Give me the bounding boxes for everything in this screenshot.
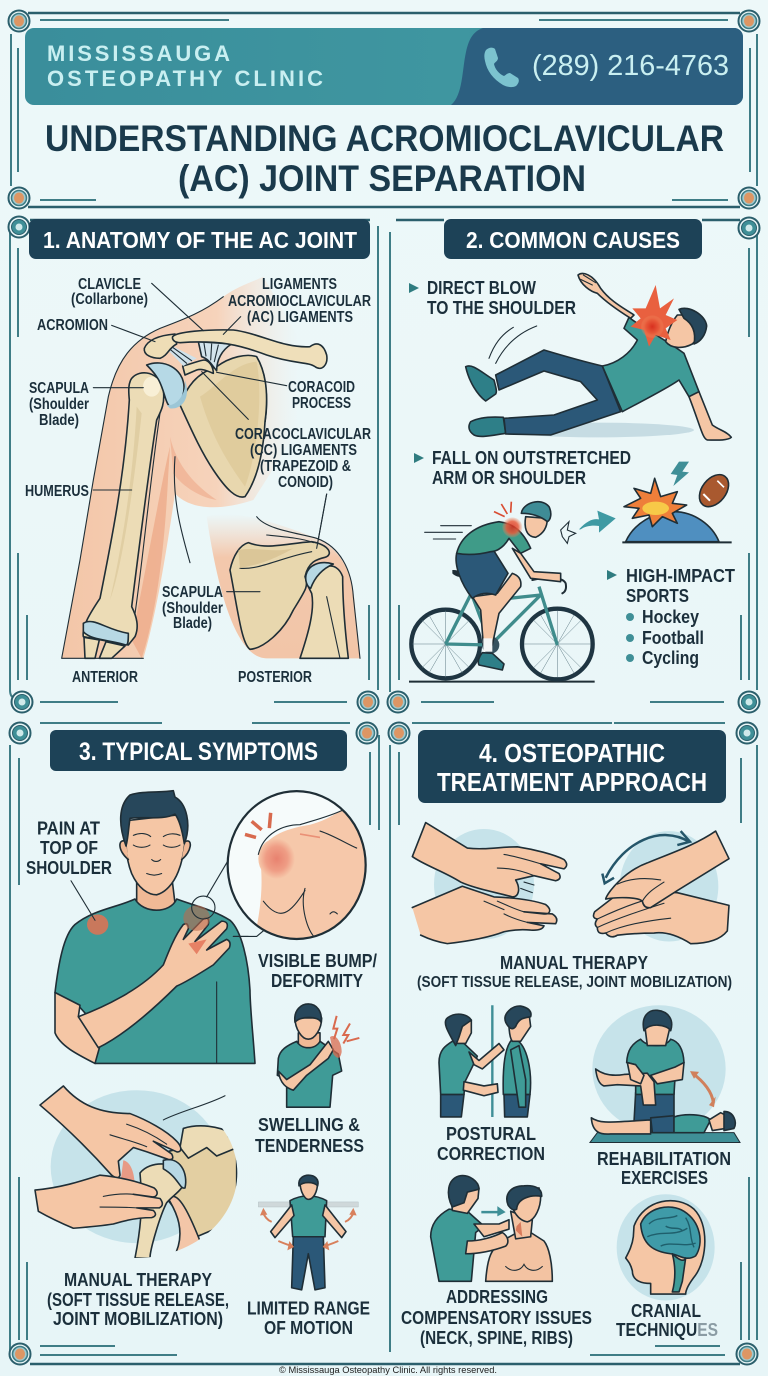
- anatomy labels: ANTERIOR: [72, 669, 138, 686]
- panel 2 frame: [388, 218, 760, 712]
- fall label: ARM OR SHOULDER: [432, 468, 586, 488]
- anatomy labels: ACROMIOCLAVICULAR: [228, 293, 371, 310]
- rotation arrow: [606, 835, 689, 878]
- illustration: addressing compensatory issues: [431, 1176, 552, 1281]
- treatment text: rehabilitation: REHABILITATION: [597, 1149, 731, 1169]
- high-impact sports list: Football: [642, 628, 704, 648]
- therapist: [441, 1094, 464, 1117]
- head: [126, 814, 186, 895]
- symptom text: manual therapy: JOINT MOBILIZATION): [53, 1309, 223, 1329]
- therapist lower hand: [35, 1175, 162, 1228]
- panel 2 heading: [444, 219, 702, 259]
- high-impact sports list: Cycling: [642, 648, 699, 668]
- trailing leg and shoes: [466, 366, 496, 401]
- treatment text: manual therapy: [417, 953, 732, 991]
- symptom text: bump: DEFORMITY: [271, 971, 363, 991]
- panel 3 frame: [10, 722, 384, 1364]
- anatomy labels: HUMERUS: [25, 483, 89, 500]
- panel 3 heading: [50, 730, 347, 771]
- shoulder pain marks: [183, 905, 210, 931]
- acromion: [144, 334, 177, 358]
- small spark: [561, 522, 576, 543]
- symptom text: bump: VISIBLE BUMP/: [258, 951, 377, 971]
- upper arm: [55, 992, 100, 1063]
- banner teal band: [25, 28, 743, 105]
- therapist torso: [627, 1039, 684, 1094]
- direct blow label: [409, 278, 576, 318]
- copyright footer: © Mississauga Osteopathy Clinic. All rights reserved.: [279, 1365, 497, 1375]
- anatomy labels: CLAVICLE: [78, 276, 141, 293]
- illustration: cyclist: [409, 502, 595, 682]
- direct blow label: TO THE SHOULDER: [427, 298, 576, 318]
- helmet dome: [626, 512, 719, 542]
- illustration: manual therapy on shoulder: [35, 1086, 237, 1258]
- symptom text: pain: PAIN AT: [37, 818, 100, 838]
- panel: anatomy of the AC joint: [8, 216, 378, 712]
- anatomy labels: LIGAMENTS: [262, 276, 337, 293]
- panel: typical symptoms: [10, 722, 384, 1364]
- pain spot on cyclist: [502, 517, 522, 537]
- lightning: [671, 462, 689, 486]
- symptom text: manual therapy: (SOFT TISSUE RELEASE,: [47, 1290, 229, 1310]
- cyclist shorts: [456, 548, 508, 598]
- patient body: [486, 1233, 552, 1281]
- illustration: man with shoulder pain: [55, 791, 370, 1063]
- therapist: [431, 1209, 484, 1281]
- raised arm: [578, 274, 634, 318]
- illustration: rehabilitation exercises: [590, 1005, 740, 1142]
- title: (AC) JOINT SEPARATION: [178, 157, 586, 199]
- treatment text: compensatory: ADDRESSING: [446, 1287, 548, 1307]
- cyclist head and helmet: [525, 517, 547, 537]
- anatomy labels: (Shoulder: [29, 396, 89, 413]
- title: [45, 117, 724, 199]
- neck: [137, 876, 175, 914]
- crossing forearm and hand: [78, 918, 230, 1048]
- clavicle: [172, 330, 327, 368]
- symptom text: manual therapy: MANUAL THERAPY: [64, 1270, 212, 1290]
- cyclist arm: [512, 548, 561, 582]
- posterior scapula: [230, 542, 329, 649]
- acromioclavicular ligaments: [198, 342, 232, 371]
- humerus bone: [83, 373, 164, 645]
- magnifier small circle: [192, 896, 215, 919]
- panel 2 heading: 2. COMMON CAUSES: [466, 227, 680, 253]
- treatment text: compensatory: [401, 1287, 592, 1348]
- illustration: cranial techniques head and brain: [617, 1194, 715, 1300]
- facial features: [133, 833, 180, 875]
- clinic name: MISSISSAUGA: [47, 41, 230, 66]
- clinic name: OSTEOPATHY CLINIC: [47, 66, 323, 91]
- anatomy labels: CONOID): [278, 474, 333, 491]
- treatment text: compensatory: COMPENSATORY ISSUES: [401, 1308, 592, 1328]
- header frame: [8, 10, 760, 208]
- treatment text: compensatory: (NECK, SPINE, RIBS): [420, 1328, 573, 1348]
- anatomy labels: (AC) LIGAMENTS: [247, 309, 353, 326]
- anatomy labels: CORACOID: [288, 379, 355, 396]
- panel 4 heading: 4. OSTEOPATHIC: [479, 740, 665, 768]
- panel: common causes: [388, 218, 760, 712]
- illustration: postural correction: [439, 1005, 531, 1117]
- anatomy labels: Blade): [39, 412, 79, 429]
- patient neck: [511, 1211, 532, 1239]
- cyclist jersey: [457, 522, 531, 554]
- pain pointer: [71, 881, 95, 920]
- high-impact sports list: Hockey: [642, 607, 699, 627]
- posterior cartilage: [306, 563, 333, 588]
- symptom text: swelling: [255, 1115, 364, 1156]
- clinic banner: [25, 28, 743, 105]
- anatomy labels: (CC) LIGAMENTS: [250, 442, 357, 459]
- symptom text: pain: [26, 818, 112, 878]
- panel 1 frame: [8, 216, 378, 712]
- trousers: [496, 350, 621, 435]
- anatomy labels: PROCESS: [292, 395, 351, 412]
- symptom text: bump: [258, 951, 377, 991]
- treatment text: rehabilitation: [597, 1149, 731, 1188]
- treatment text: cranial: [616, 1301, 718, 1340]
- left upper hand: [412, 823, 567, 897]
- impact burst: [631, 285, 677, 347]
- callout circle: [228, 791, 370, 948]
- icon: phone: [484, 48, 519, 87]
- anatomy illustration: anterior view: [62, 277, 327, 658]
- panel 4 heading: TREATMENT APPROACH: [437, 769, 707, 797]
- humeral cartilage: [147, 363, 184, 407]
- anatomy labels: SCAPULA: [162, 584, 223, 601]
- high-impact sports list: HIGH-IMPACT: [626, 566, 735, 586]
- symptom text: swelling: SWELLING &: [258, 1115, 360, 1135]
- treatment text: postural: POSTURAL: [446, 1124, 536, 1144]
- explosion: [624, 478, 687, 527]
- banner dark phone block: [451, 28, 743, 105]
- anatomy labels: [25, 276, 371, 686]
- treatment text: manual therapy: MANUAL THERAPY: [500, 953, 648, 973]
- symptom text: range of motion: [247, 1298, 370, 1338]
- anatomy labels: CORACOCLAVICULAR: [235, 426, 371, 443]
- panel 1 heading: 1. ANATOMY OF THE AC JOINT: [43, 227, 357, 253]
- illustration: sports impact: [561, 462, 735, 543]
- therapist legs: [634, 1092, 674, 1122]
- patient raised leg: [596, 1069, 656, 1105]
- bicycle wheels: [411, 609, 593, 679]
- phone number: (289) 216-4763: [532, 50, 729, 82]
- torso shirt: [602, 317, 699, 412]
- high-impact sports list: [607, 566, 735, 668]
- right lower hand: [593, 891, 729, 944]
- illustration: man falling on shoulder: [466, 274, 731, 440]
- illustration: swelling figure: [277, 1004, 359, 1107]
- leader lines: [93, 283, 327, 592]
- anatomy illustration: posterior view: [207, 494, 360, 658]
- symptom text: range of motion: OF MOTION: [264, 1318, 353, 1338]
- symptom text: pain: TOP OF: [40, 838, 98, 858]
- bicycle frame: [446, 587, 557, 645]
- head: [666, 315, 699, 347]
- hair: [121, 791, 188, 846]
- panel 3 heading: 3. TYPICAL SYMPTOMS: [79, 738, 318, 766]
- clinic name: [47, 41, 323, 91]
- fall label: [414, 448, 631, 488]
- direct blow label: DIRECT BLOW: [427, 278, 536, 298]
- panel: osteopathic treatment approach: [384, 722, 758, 1364]
- anatomy labels: SCAPULA: [29, 380, 89, 397]
- illustration: limited range of motion figure: [258, 1175, 358, 1290]
- elbow cartilage and forearm bones: [83, 621, 128, 645]
- right upper hand: [606, 831, 729, 908]
- anatomy labels: (Shoulder: [162, 600, 223, 617]
- anatomy labels: Blade): [173, 615, 212, 632]
- symptom text: pain: SHOULDER: [26, 858, 112, 878]
- symptom text: manual therapy: [47, 1270, 229, 1329]
- supporting arm: [689, 392, 731, 440]
- football: [693, 469, 735, 512]
- patient lying body: [591, 1118, 651, 1134]
- treatment text: postural: CORRECTION: [437, 1144, 545, 1164]
- symptom text: range of motion: LIMITED RANGE: [247, 1298, 370, 1318]
- treatment text: cranial: TECHNIQUES: [616, 1320, 718, 1340]
- panel 4 heading: [418, 730, 726, 803]
- arrow: [579, 511, 616, 533]
- patient head: [510, 1188, 541, 1222]
- anatomy labels: POSTERIOR: [238, 669, 312, 686]
- illustration: manual therapy hands: [412, 823, 729, 944]
- fall label: FALL ON OUTSTRETCHED: [432, 448, 631, 468]
- panel 1 heading: [29, 219, 370, 259]
- scapula bone: [180, 355, 267, 497]
- patient: [504, 1094, 530, 1117]
- panel 4 frame: [384, 722, 758, 1364]
- posterior humerus: [300, 566, 348, 658]
- shirt: [55, 899, 255, 1063]
- treatment text: rehabilitation: EXERCISES: [621, 1168, 708, 1188]
- left lower hand: [412, 886, 557, 944]
- high-impact sports list: SPORTS: [626, 586, 689, 606]
- treatment text: postural: [437, 1124, 545, 1164]
- symptom text: swelling: TENDERNESS: [255, 1136, 364, 1156]
- anatomy labels: ACROMION: [37, 317, 108, 334]
- treatment text: cranial: CRANIAL: [631, 1301, 701, 1321]
- therapist upper hand: [40, 1086, 181, 1178]
- anatomy labels: (Collarbone): [71, 291, 148, 308]
- cyclist leg: [472, 573, 521, 645]
- coracoid process: [183, 360, 213, 375]
- anatomy labels: (TRAPEZOID &: [260, 458, 351, 475]
